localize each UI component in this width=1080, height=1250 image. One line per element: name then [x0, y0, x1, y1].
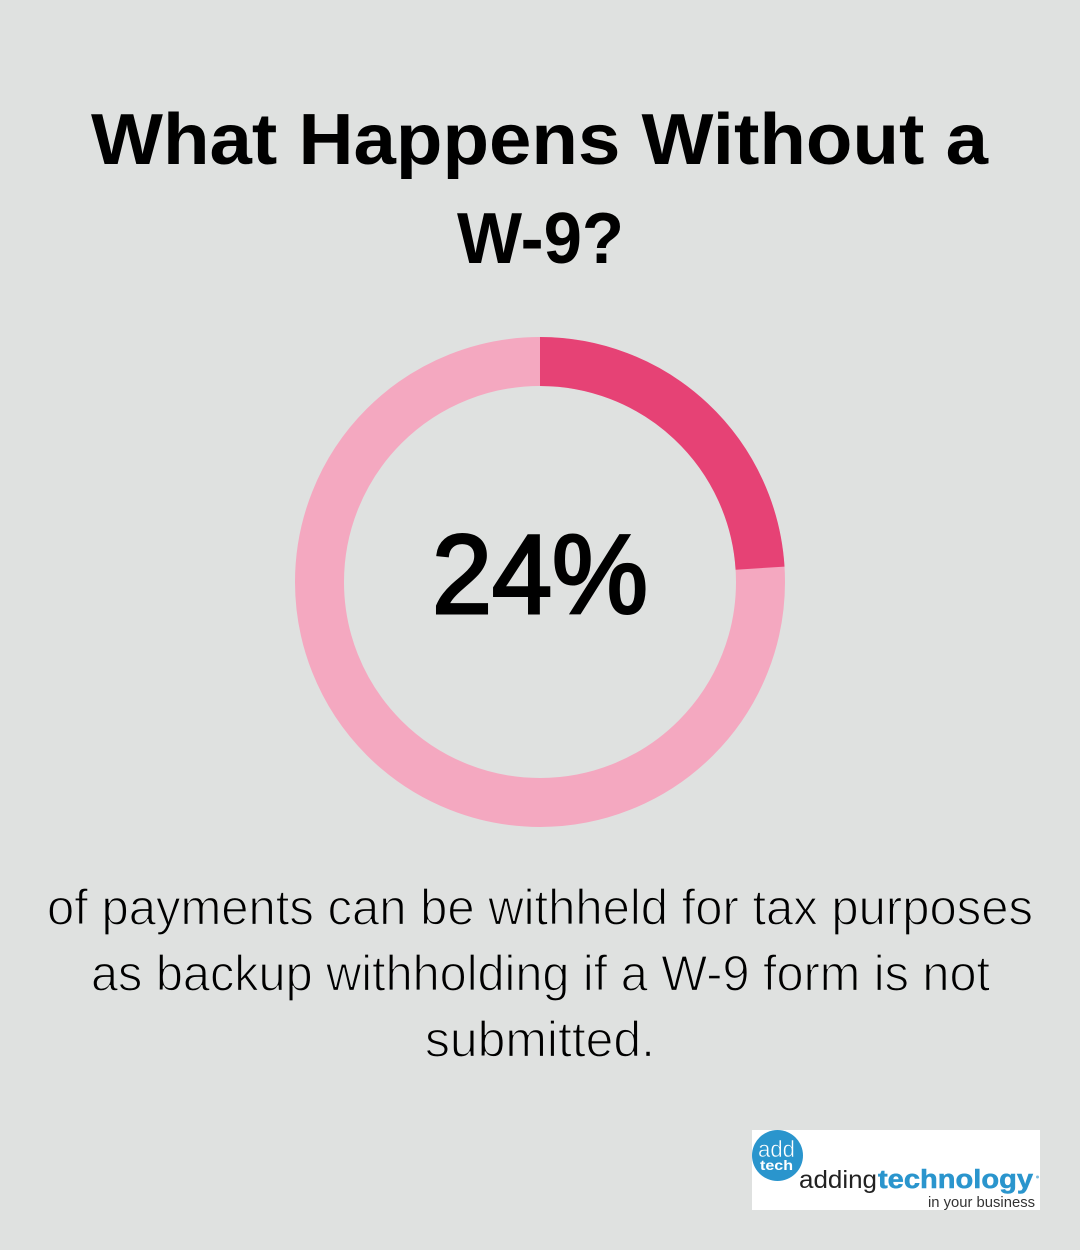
logo wordmark: adding [799, 1166, 877, 1194]
logo tagline: in your business [928, 1195, 1035, 1211]
description text [47, 878, 1033, 1068]
title: W-9? [457, 198, 624, 279]
donut value: 24% [432, 512, 648, 637]
donut chart: 24% [320, 362, 760, 802]
logo: adding technology: technology [878, 1166, 1034, 1194]
logo: adding technology [752, 1130, 1040, 1211]
icon: add tech badge [752, 1130, 803, 1181]
description text: as backup withholding if a W-9 form is not [91, 944, 990, 1002]
description text: of payments can be withheld for tax purposes [47, 878, 1033, 936]
title [91, 99, 989, 279]
icon: add tech badge: tech [760, 1157, 793, 1173]
logo registered mark [1036, 1176, 1039, 1178]
description text: submitted. [425, 1010, 655, 1068]
title: What Happens Without a [91, 99, 989, 180]
icon: add tech badge: add [758, 1136, 795, 1162]
